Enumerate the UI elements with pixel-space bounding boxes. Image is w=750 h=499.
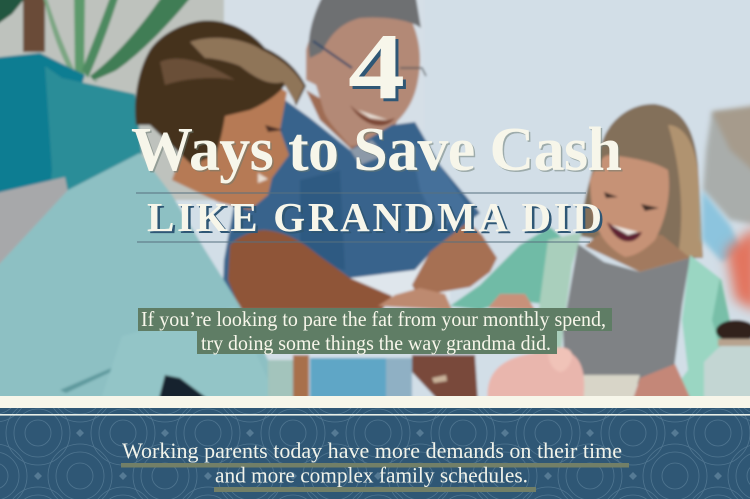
headline number: 4 <box>348 15 405 119</box>
headline: Like Grandma Did: LIKE GRANDMA DID <box>150 196 604 242</box>
man's arms <box>228 222 535 310</box>
headline: Like Grandma Did: LIKE GRANDMA DID <box>147 194 602 240</box>
girl's hair <box>580 104 703 258</box>
woman's forearm <box>293 355 309 402</box>
lower headline rule <box>137 242 590 243</box>
headline: Ways to Save Cash: Ways to Save Cash <box>131 116 622 184</box>
girl's hand <box>632 363 691 396</box>
section intro text with green underlines: and more complex family schedules. <box>215 462 528 488</box>
blue cup <box>310 358 412 402</box>
girl's grey t-shirt <box>563 244 690 384</box>
intro text with green highlight: try doing some things the way grandma did. <box>201 331 551 355</box>
man's hair <box>309 0 421 58</box>
teal sofa and cushions <box>0 53 142 272</box>
intro text with green highlight: If you’re looking to pare the fat from your monthly spend, <box>141 307 606 331</box>
girl's neck <box>585 235 690 272</box>
section intro text with green underlines <box>121 438 629 492</box>
piggy bank <box>488 347 584 402</box>
woman's face and neck <box>172 82 289 210</box>
table <box>582 373 641 396</box>
upper headline rule <box>136 192 586 194</box>
girl's face <box>590 155 669 257</box>
girl's mint hoodie <box>450 227 731 402</box>
man's neck and face <box>306 17 420 150</box>
headline number: 4 <box>351 18 408 122</box>
woman's light teal shirt <box>0 153 293 402</box>
headline: Ways to Save Cash: Ways to Save Cash <box>132 118 624 186</box>
intro text with green highlight <box>138 307 612 355</box>
man's glasses <box>313 41 426 76</box>
woman's brown hair <box>135 21 306 165</box>
cream divider band <box>0 396 750 408</box>
background right cushions and jar <box>702 105 750 402</box>
man's denim shirt <box>222 100 480 308</box>
section intro text with green underlines: Working parents today have more demands on their time <box>122 438 622 463</box>
panel: navy patterned section <box>0 408 750 499</box>
houseplant <box>0 0 195 85</box>
man's hand with ring <box>412 355 478 402</box>
